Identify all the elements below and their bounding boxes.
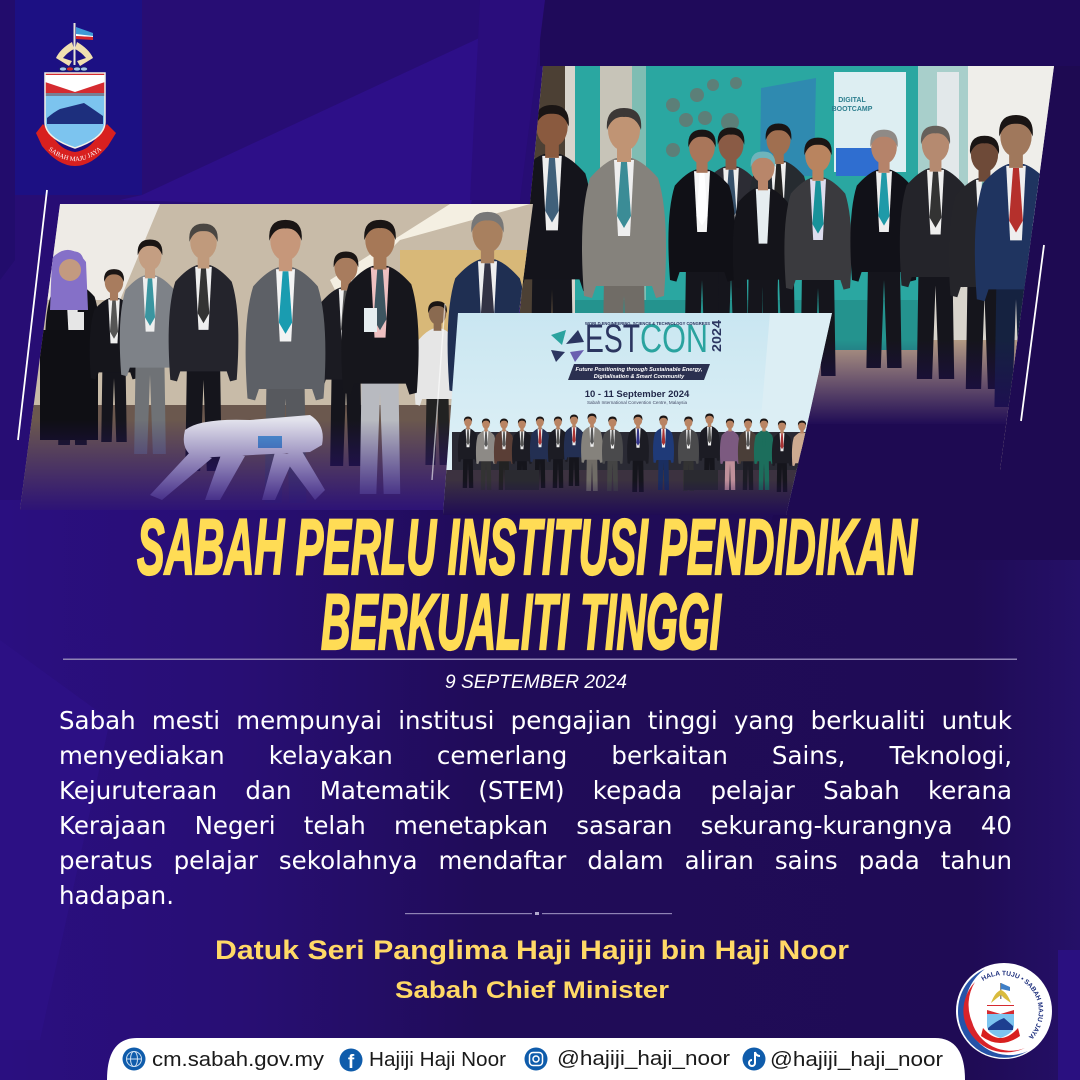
icon: tiktok — [742, 1048, 766, 1070]
theme banner: Future Positioning through Sustainable Energy, — [576, 367, 703, 373]
badge: Hala Tuju Sabah Maju Jaya: HALA TUJU • SABAH MAJU JAYA — [981, 970, 1044, 1039]
icon: facebook — [340, 1048, 362, 1073]
body paragraph: hadapan. — [59, 881, 174, 910]
facebook name: Hajiji Haji Noor — [369, 1049, 506, 1071]
shield — [45, 73, 105, 153]
digital bootcamp board — [832, 72, 906, 176]
instagram handle: @hajiji_haji_noor — [557, 1048, 730, 1070]
digital bootcamp board: BOOTCAMP — [832, 106, 873, 113]
icon: website globe — [122, 1048, 146, 1070]
website: cm.sabah.gov.my — [152, 1049, 324, 1071]
people in booth photo — [511, 105, 1057, 407]
crowd on stage — [443, 414, 806, 515]
body paragraph: peratus pelajar sekolahnya mendaftar dalam aliran sains pada tahun — [59, 846, 1012, 875]
body paragraph — [59, 706, 1012, 910]
ribbon motto — [36, 124, 116, 166]
white frame: photo 2 — [820, 245, 1044, 421]
ESTCON logo: WORLD ENGINEERING, SCIENCE & TECHNOLOGY CONGRESS — [585, 321, 710, 326]
event date: 10 - 11 September 2024 — [585, 389, 690, 400]
ESTCON logo: CON — [640, 317, 708, 361]
speaker title: Sabah Chief Minister — [395, 977, 669, 1004]
white frame: photo 1 — [18, 190, 300, 440]
robot dog — [150, 415, 325, 500]
ESTCON logo: EST — [585, 317, 640, 361]
icon: facebook: f — [348, 1052, 355, 1073]
tiktok handle: @hajiji_haji_noor — [770, 1049, 943, 1071]
date: 9 SEPTEMBER 2024 — [445, 672, 627, 693]
photo 3: ESTCON stage group — [440, 310, 840, 520]
body paragraph: Kejuruteraan dan Matematik (STEM) kepada pelajar Sabah kerana — [59, 776, 1012, 805]
icon: instagram — [524, 1048, 548, 1070]
event venue: Sabah International Convention Centre, Malaysia — [587, 400, 687, 405]
headline — [137, 502, 918, 666]
white frame: photo 3 — [432, 304, 600, 480]
ribbon motto: SABAH MAJU JAYA — [48, 147, 102, 162]
footer bar — [107, 1038, 965, 1080]
poster — [760, 78, 816, 176]
people in delegation photo — [40, 212, 527, 503]
body paragraph: menyediakan kelayakan cemerlang berkaitan Sains, Teknologi, — [59, 741, 1012, 770]
theme banner — [568, 364, 710, 380]
ESTCON logo: 2024 — [709, 319, 724, 352]
body paragraph: Kerajaan Negeri telah menetapkan sasaran sekurang-kurangnya 40 — [59, 811, 1012, 840]
photo 2: group at exhibition booth — [500, 60, 1070, 480]
headline line 2: BERKUALITI TINGGI — [321, 577, 722, 666]
speaker name: Datuk Seri Panglima Haji Hajiji bin Haji Noor — [215, 935, 850, 965]
crest arms — [56, 42, 93, 66]
flag on pole — [74, 23, 93, 65]
badge: Hala Tuju Sabah Maju Jaya — [956, 963, 1052, 1059]
body paragraph: Sabah mesti mempunyai institusi pengajian tinggi yang berkualiti untuk — [59, 706, 1012, 735]
ESTCON logo — [551, 317, 724, 362]
digital bootcamp board: DIGITAL — [838, 97, 866, 104]
timeline panel — [666, 77, 742, 157]
theme banner: Digitalisation & Smart Community — [594, 374, 685, 380]
photo 1: delegation with robot dog — [10, 200, 540, 520]
logo: Sabah coat of arms — [36, 23, 116, 166]
